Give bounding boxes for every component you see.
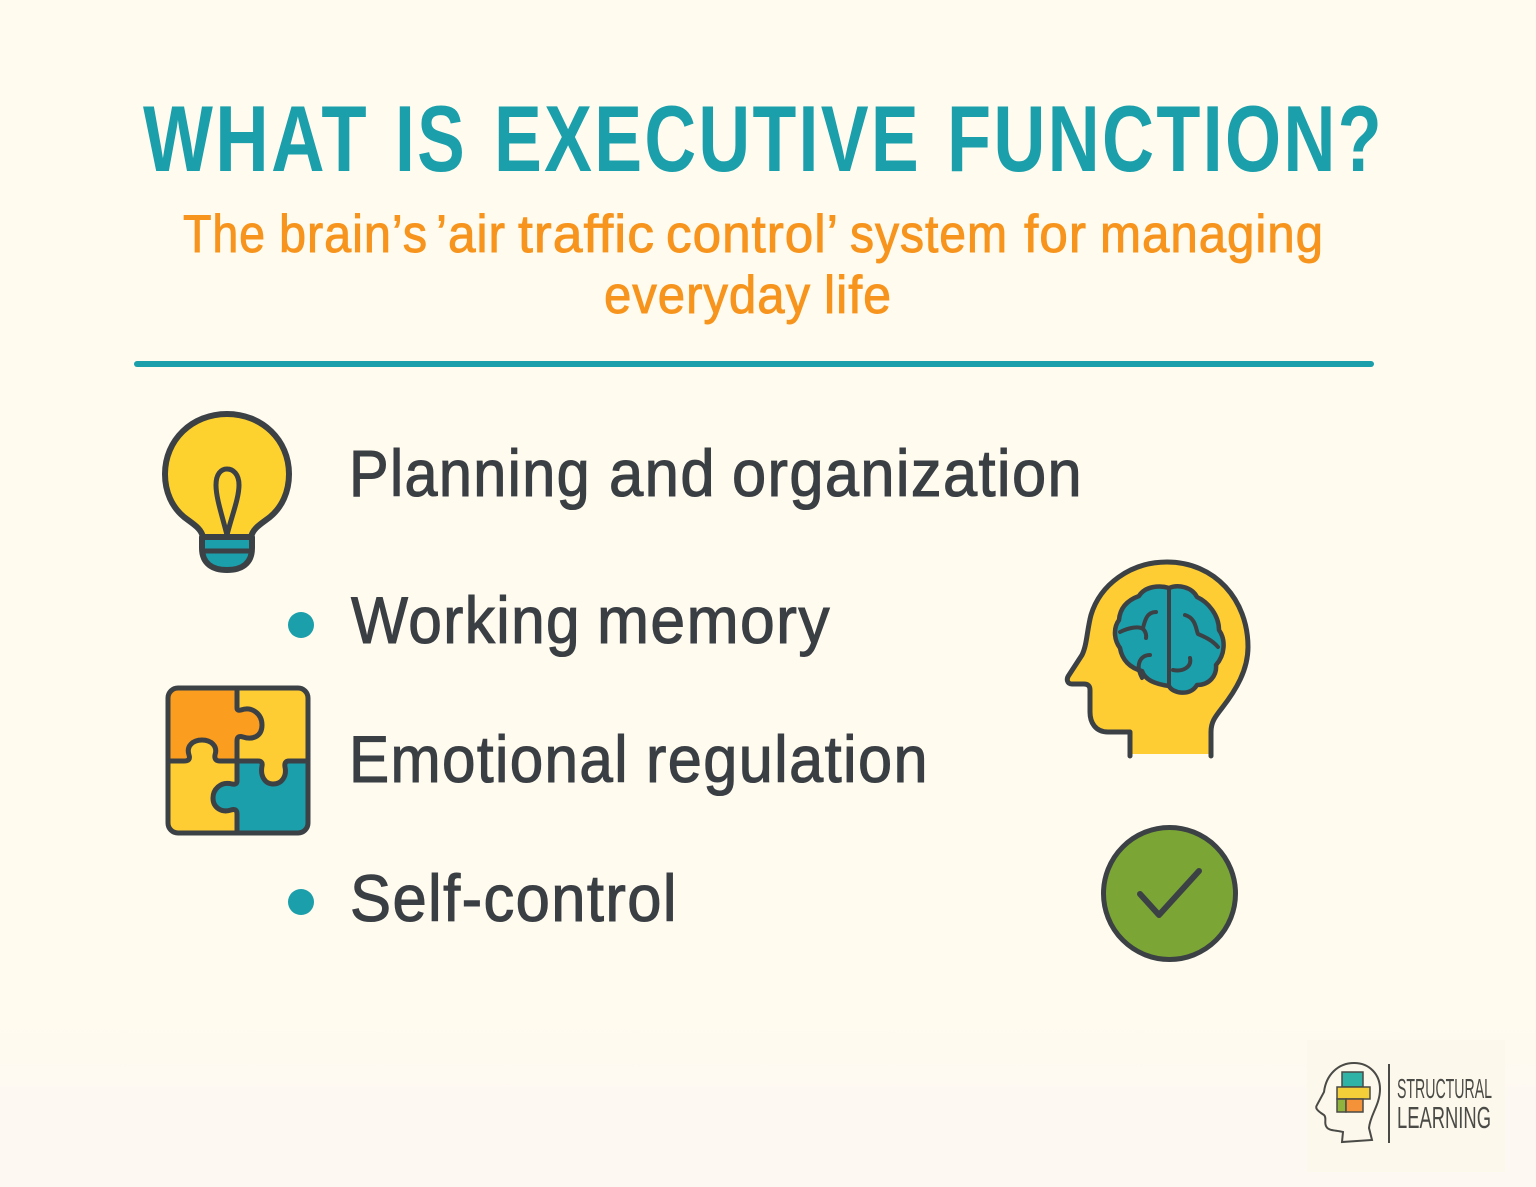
subtitle: [183, 205, 1324, 325]
title: IS: [395, 86, 467, 191]
list item: working memory: memory: [597, 583, 831, 657]
subtitle: The: [183, 205, 266, 264]
list item: emotional regulation: regulation: [646, 722, 929, 796]
list item: planning and organization: and: [609, 436, 716, 510]
title: EXECUTIVE: [494, 86, 921, 191]
list item: emotional regulation: Emotional: [349, 722, 629, 796]
logo: Structural Learning: [1307, 1040, 1505, 1172]
logo head icon: [1316, 1063, 1380, 1142]
logo wordmark: [1397, 1073, 1492, 1135]
infographic: [134, 106, 1492, 1144]
title: [143, 86, 1384, 191]
subtitle: for: [1024, 205, 1087, 264]
icon: light bulb: [165, 414, 289, 570]
list item: self-control: Self-control: [350, 861, 678, 935]
subtitle: ’air: [436, 205, 506, 264]
list item: planning and organization: organization: [732, 436, 1083, 510]
list item: working memory: Working: [351, 583, 581, 657]
list item: planning and organization: Planning: [349, 436, 591, 510]
subtitle: everyday: [604, 266, 811, 325]
icon: puzzle: [168, 688, 309, 834]
list item: working memory: [288, 583, 831, 657]
subtitle: life: [824, 266, 892, 325]
list item: emotional regulation: [349, 722, 929, 796]
title: WHAT: [143, 86, 369, 191]
subtitle: system: [850, 205, 1008, 264]
icon: green check: [1104, 828, 1236, 960]
subtitle: managing: [1100, 205, 1324, 264]
subtitle: traffic: [518, 205, 655, 264]
icon: head with brain: [1067, 562, 1248, 756]
subtitle: brain’s: [279, 205, 428, 264]
subtitle: control’: [666, 205, 839, 264]
list item: planning and organization: [349, 436, 1083, 510]
title: FUNCTION?: [947, 86, 1384, 191]
